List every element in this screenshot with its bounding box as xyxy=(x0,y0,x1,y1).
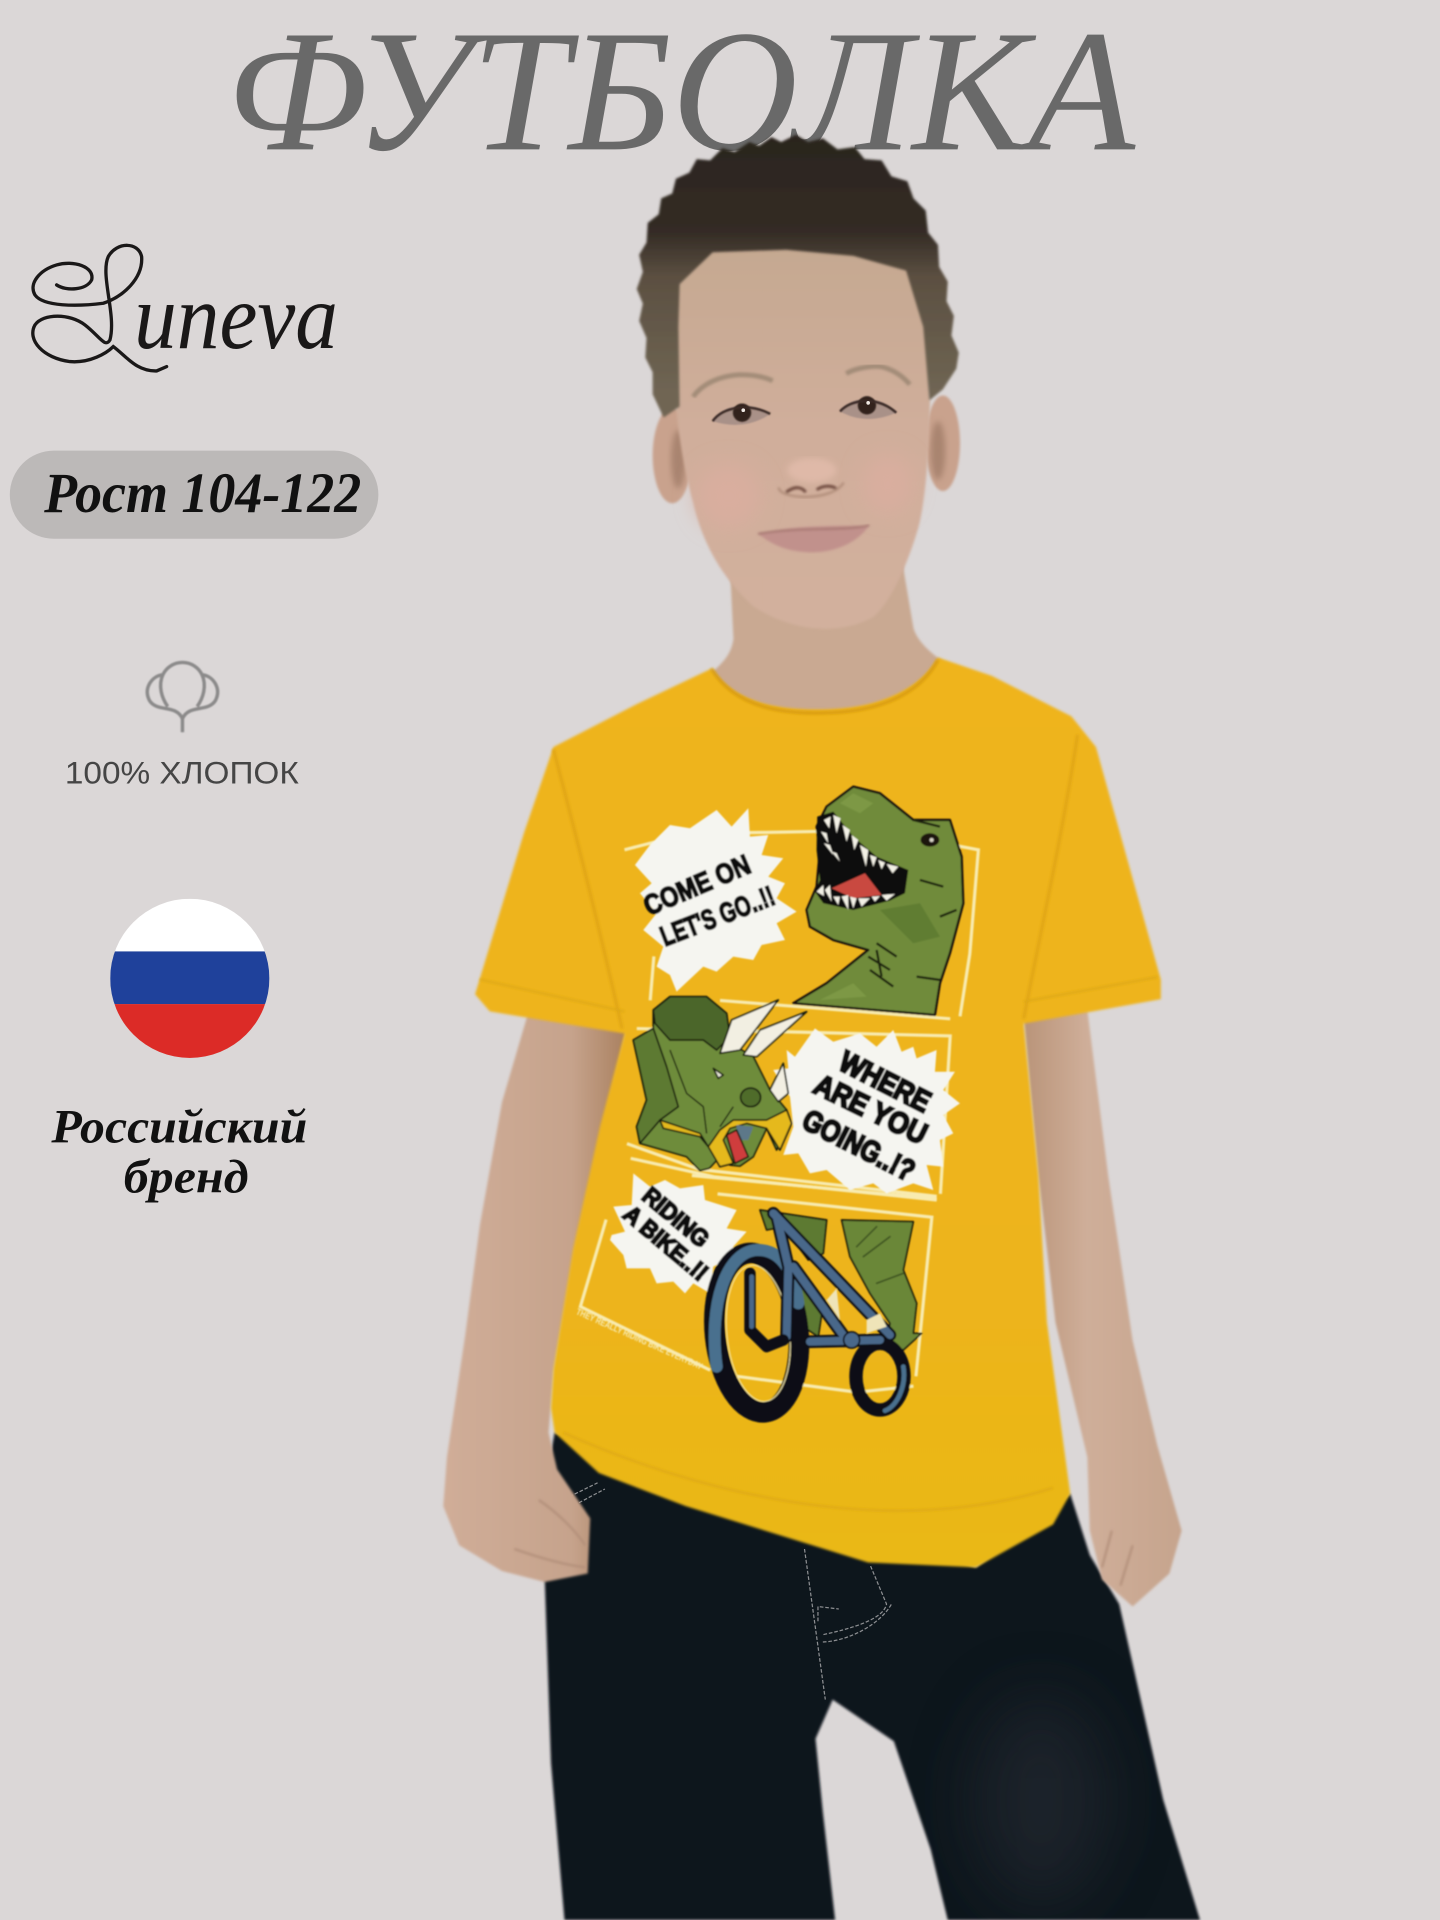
material label: 100% ХЛОПОК xyxy=(65,756,299,791)
left arm and hand xyxy=(443,1010,627,1582)
brand logo: Luneva xyxy=(33,245,338,371)
cheek tones xyxy=(697,454,912,528)
burst text: where are you going: ARE YOU xyxy=(809,1068,932,1151)
t-shirt xyxy=(475,658,1161,1567)
burst: where are you going xyxy=(773,1028,960,1193)
t-rex xyxy=(793,787,963,1015)
burst text: where are you going: WHERE xyxy=(833,1045,936,1119)
triceratops xyxy=(633,997,807,1171)
burst text: come on xyxy=(639,849,779,952)
burst: riding a bike xyxy=(610,1173,747,1293)
brand logo: Luneva: Luneva xyxy=(133,266,338,369)
burst text: where are you going xyxy=(797,1045,936,1188)
neck xyxy=(708,563,945,735)
right arm and hand xyxy=(1024,1010,1182,1607)
comic panel frames xyxy=(580,831,978,1392)
photo: boy in yellow t-shirt xyxy=(443,135,1200,1920)
burst text: riding a bike: A BIKE..!! xyxy=(618,1201,713,1287)
hair xyxy=(637,135,959,418)
burst text: come on: COME ON xyxy=(639,849,755,921)
jeans xyxy=(540,1433,1200,1920)
burst text: where are you going: GOING..!? xyxy=(797,1104,920,1188)
brand origin text xyxy=(50,1100,307,1204)
shirt folds and collar xyxy=(480,660,1157,1511)
face xyxy=(669,233,930,629)
title: ФУТБОЛКА xyxy=(227,0,1136,187)
icon: Russian flag xyxy=(110,899,269,1058)
left ear xyxy=(653,408,692,503)
burst text: come on: LET'S GO..!! xyxy=(656,880,779,952)
burst: come on xyxy=(635,808,797,992)
t-shirt print xyxy=(575,787,978,1417)
burst text: riding a bike: RIDING xyxy=(637,1182,714,1253)
height badge: Рост 104-122 xyxy=(43,462,361,525)
height badge xyxy=(10,451,378,539)
brand origin text: Российский xyxy=(50,1100,307,1153)
small print: THEY REALLY RIDING BIKE EVERYDAY xyxy=(575,1307,704,1371)
eyes and brows xyxy=(693,366,910,425)
right ear xyxy=(926,396,960,491)
dinosaur legs and bicycle xyxy=(707,1210,922,1417)
nose xyxy=(779,458,844,497)
mouth xyxy=(758,525,869,552)
icon: cotton boll xyxy=(147,662,218,732)
brand origin text: бренд xyxy=(124,1151,249,1204)
